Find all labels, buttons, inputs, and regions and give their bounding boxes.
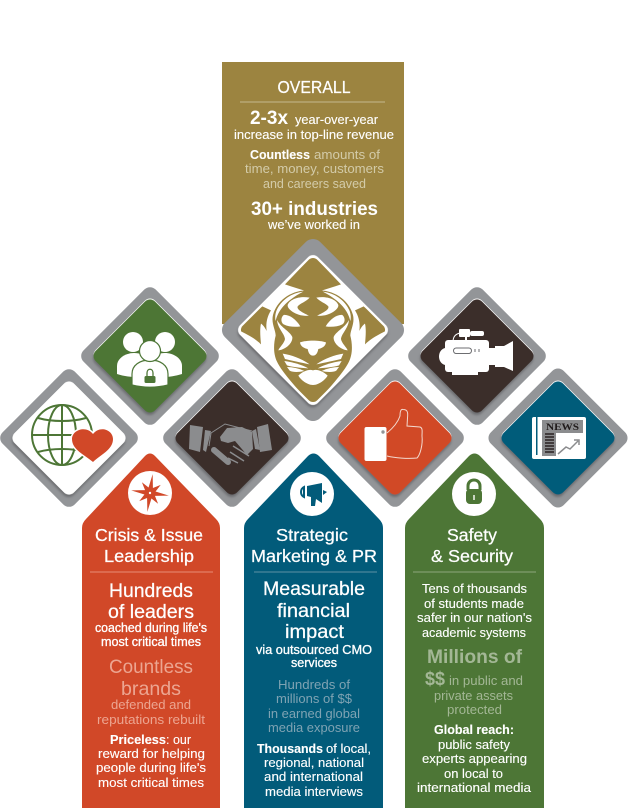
stat: 30+ industries <box>251 198 378 232</box>
heading: crisis and issue leadership: Leadership <box>104 546 194 566</box>
stat: countless brands: Countless <box>109 656 193 678</box>
icon: newspaper <box>485 365 628 511</box>
panel: overall <box>222 62 404 330</box>
icon: handshake <box>160 366 304 510</box>
stat: countless amounts: amounts of <box>314 148 381 162</box>
stat: 2-3x revenue <box>234 107 394 142</box>
stat: thousands of interviews: media interviews <box>265 785 363 799</box>
stat: millions in assets protected: private assets <box>434 689 513 703</box>
icon: tiger logo diamond <box>218 235 408 425</box>
stat: earned media exposure: media exposure <box>268 721 360 735</box>
stat: global reach <box>417 723 531 795</box>
stat: global reach: on local to <box>444 767 503 781</box>
stat: global reach: Global reach: <box>434 723 514 737</box>
icon: globe and heart <box>0 366 141 510</box>
stat: thousands of interviews: of local, <box>326 742 371 756</box>
stat: priceless reward: Priceless <box>110 733 166 747</box>
heading: safety and security <box>431 525 513 566</box>
stat: thousands of interviews: Thousands <box>257 742 323 756</box>
stat: hundreds of leaders: coached during life's <box>95 621 207 635</box>
stat: 2-3x revenue: year-over-year <box>295 113 378 127</box>
stat: tens of thousands of students: Tens of thousands <box>422 582 527 596</box>
stat: countless brands: defended and <box>111 698 191 712</box>
stat: countless brands: brands <box>121 678 181 700</box>
stat: priceless reward: most critical times <box>98 776 204 790</box>
panel: strategic marketing and pr <box>244 454 383 808</box>
panel: safety and security <box>405 454 544 808</box>
stat: thousands of interviews <box>257 742 371 799</box>
icon: padlock <box>452 472 496 516</box>
stat: hundreds of leaders: of leaders <box>108 601 194 623</box>
icon: thumbs up <box>323 366 467 510</box>
stat: thousands of interviews: regional, national <box>264 756 364 770</box>
heading: safety and security: Safety <box>447 525 497 545</box>
stat: measurable financial impact: services <box>291 656 337 670</box>
heading: safety and security: & Security <box>431 546 513 566</box>
stat: measurable financial impact <box>256 578 372 670</box>
stat: measurable financial impact: Measurable <box>263 578 365 600</box>
stat: hundreds of leaders <box>95 580 207 649</box>
stat: earned media exposure: in earned global <box>268 707 360 721</box>
stat: millions in assets protected: in public and <box>449 674 523 688</box>
stat: global reach: public safety <box>438 738 511 752</box>
heading: strategic marketing and pr <box>251 525 377 566</box>
stat: priceless reward <box>96 733 206 790</box>
stat: hundreds of leaders: most critical times <box>101 635 201 649</box>
heading: crisis and issue leadership: Crisis & Issue <box>95 525 203 545</box>
stat: millions in assets protected: Millions of <box>427 646 522 668</box>
icon: team with lock <box>78 284 222 428</box>
stat: 2-3x revenue: 2-3x <box>250 107 288 129</box>
stat: millions in assets protected: protected <box>447 703 502 717</box>
stat: countless amounts: Countless <box>250 148 310 162</box>
icon: megaphone <box>290 472 334 516</box>
heading: strategic marketing and pr: Strategic <box>276 525 348 545</box>
stat: countless brands <box>97 656 206 727</box>
icon: newspaper: NEWS <box>546 423 579 433</box>
stat: measurable financial impact: financial <box>277 600 350 622</box>
stat: earned media exposure <box>268 678 360 735</box>
stat: global reach: experts appearing <box>422 752 527 766</box>
stat: 30+ industries: we’ve worked in <box>267 218 360 232</box>
stat: 30+ industries: 30+ industries <box>251 198 378 220</box>
stat: global reach: international media <box>417 781 531 795</box>
stat: countless brands: reputations rebuilt <box>97 713 206 727</box>
heading: strategic marketing and pr: Marketing & PR <box>251 546 377 566</box>
stat: measurable financial impact: impact <box>285 621 345 643</box>
icon: compass star <box>128 471 172 515</box>
stat: hundreds of leaders: Hundreds <box>109 580 193 602</box>
stat: tens of thousands of students <box>417 582 532 640</box>
stat: 2-3x revenue: increase in top-line revenue <box>234 128 394 142</box>
stat: priceless reward: reward for helping <box>98 747 205 761</box>
stat: countless amounts: and careers saved <box>263 177 366 191</box>
heading: overall: OVERALL <box>278 77 351 97</box>
stat: tens of thousands of students: of students made <box>424 597 524 611</box>
stat: millions in assets protected <box>425 646 523 717</box>
stat: earned media exposure: millions of $$ <box>276 692 352 706</box>
panel: crisis and issue leadership <box>82 454 220 808</box>
stat: earned media exposure: Hundreds of <box>278 678 351 692</box>
stat: tens of thousands of students: academic systems <box>422 626 526 640</box>
stat: thousands of interviews: and international <box>264 770 363 784</box>
icon: video camera <box>405 284 549 428</box>
stat: countless amounts <box>245 148 384 191</box>
stat: countless amounts: time, money, customers <box>245 162 384 176</box>
stat: measurable financial impact: via outsourced CMO <box>256 643 372 657</box>
stat: millions in assets protected: $$ <box>425 668 445 690</box>
stat: priceless reward: : our <box>166 733 191 747</box>
stat: tens of thousands of students: safer in our nation's <box>417 611 532 625</box>
heading: crisis and issue leadership <box>95 525 203 566</box>
stat: priceless reward: people during life's <box>96 761 206 775</box>
